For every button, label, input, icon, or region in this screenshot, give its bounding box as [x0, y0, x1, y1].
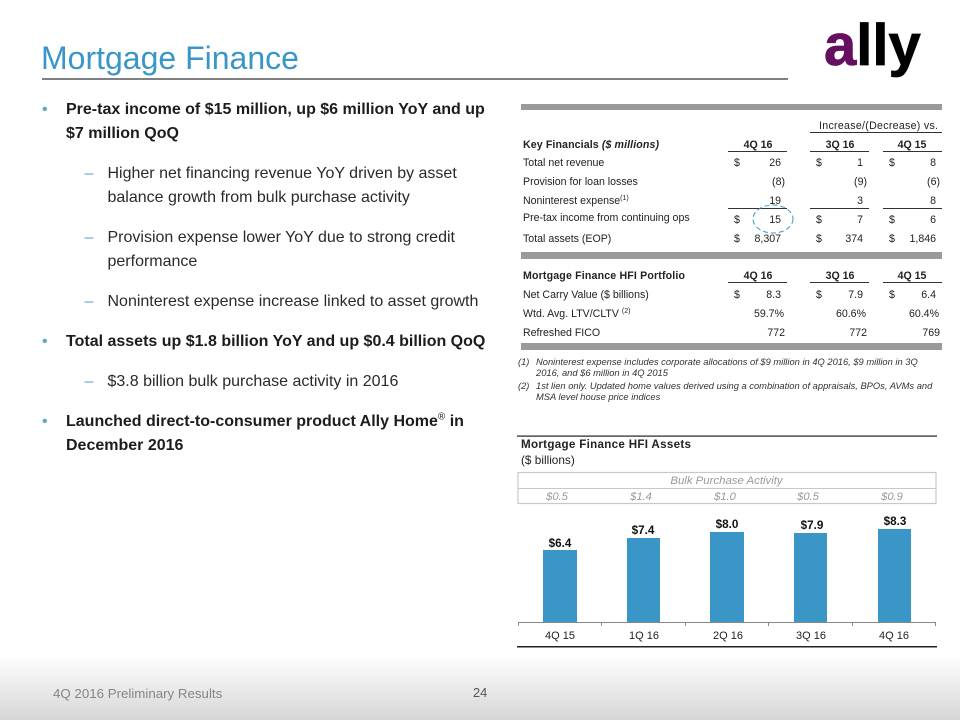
bulk purchase activity table: $1.0 [713, 491, 737, 503]
table rules [728, 132, 942, 282]
table: key financials: Pre-tax income from continuing ops [523, 212, 690, 224]
callout: dashed circle around 15 [753, 205, 793, 233]
table: key financials: $ [816, 214, 822, 226]
chart title [521, 438, 691, 467]
table: key financials: 374 [845, 233, 863, 245]
footnotes: (2) [518, 381, 529, 391]
table: key financials: Total assets (EOP) [523, 233, 611, 245]
footnotes: Noninterest expense includes corporate allocations of $9 million in 4Q 2016, $9 million in 3Q [536, 357, 918, 367]
table: key financials: $ [734, 214, 740, 226]
table: key financials: 6 [930, 214, 936, 226]
bullet 3: Launched direct-to-consumer product Ally Home® in [66, 412, 464, 430]
title: Mortgage Finance [41, 40, 299, 76]
sub-bullet: net financing revenue [84, 165, 457, 206]
table: key financials: Increase/(Decrease) vs. [819, 120, 938, 132]
bulk purchase activity table: Bulk Purchase Activity [670, 475, 784, 487]
table: key financials: 26 [769, 157, 781, 169]
table: key financials: 8 [930, 157, 936, 169]
table: HFI portfolio: $ [816, 289, 822, 301]
chart top rule [517, 436, 937, 437]
table: key financials: $ [816, 233, 822, 245]
table: key financials [523, 120, 940, 245]
table: key financials: 1 [857, 157, 863, 169]
table: key financials: Provision for loan losses [523, 176, 638, 188]
table: key financials: Noninterest expense [523, 195, 620, 207]
bullet 1 [42, 101, 485, 142]
table: HFI portfolio [523, 270, 940, 339]
footnotes: 1st lien only. Updated home values derived using a combination of appraisals, BPOs, AVMs and [536, 381, 933, 391]
bar value labels: $8.3 [884, 515, 907, 528]
bar value labels: $6.4 [549, 537, 572, 550]
table: HFI portfolio: 4Q 15 [898, 270, 927, 282]
table: HFI portfolio: Mortgage Finance HFI Portfolio [523, 270, 686, 282]
table: key financials: 3 [857, 195, 863, 207]
sub-bullet: net financing revenue: – [84, 165, 93, 182]
table: key financials: 7 [857, 214, 863, 226]
table: HFI portfolio: 6.4 [921, 289, 936, 301]
table: key financials: $ [889, 233, 895, 245]
table: HFI portfolio: Refreshed FICO [523, 327, 600, 339]
table: HFI portfolio: 7.9 [848, 289, 863, 301]
sub-bullet: net financing revenue: balance growth from bulk purchase activity [108, 189, 410, 206]
bulk purchase activity table: $0.5 [545, 491, 569, 503]
bulk purchase activity table: $0.5 [796, 491, 820, 503]
table: key financials: (6) [927, 176, 940, 188]
bulk purchase activity table [518, 472, 936, 504]
bulk purchase activity table: $0.9 [880, 491, 903, 503]
title rule [42, 78, 788, 80]
bar value labels: $7.4 [632, 524, 655, 537]
table: HFI portfolio: $ [889, 289, 895, 301]
table: HFI portfolio: $ [734, 289, 740, 301]
table: key financials: 4Q 15 [898, 139, 927, 151]
table: HFI portfolio: 60.6% [836, 308, 867, 320]
bullet 1: Pre-tax income of $15 million, up $6 million YoY and up [66, 101, 485, 118]
table: HFI portfolio: 772 [767, 327, 785, 339]
chart title: Mortgage Finance HFI Assets [521, 438, 691, 451]
sub-bullet: bulk purchase: – [84, 373, 93, 390]
table: HFI portfolio: Wtd. Avg. LTV/CLTV [523, 308, 619, 320]
sub-bullet: provision expense: performance [108, 253, 197, 270]
bullet 2: Total assets up $1.8 billion YoY and up $0.4 billion QoQ [66, 333, 485, 350]
table: key financials: 19 [769, 195, 781, 207]
chart bottom rule [517, 646, 937, 648]
sub-bullet: provision expense: – [84, 229, 93, 246]
bullet list [42, 101, 485, 454]
table: key financials: 1,846 [909, 233, 936, 245]
table: HFI portfolio: (2) [622, 308, 630, 315]
bullet 3: • [42, 413, 48, 430]
table: key financials: 8 [930, 195, 936, 207]
table: HFI portfolio: 4Q 16 [744, 270, 773, 282]
footer label: 4Q 2016 Preliminary Results [53, 686, 222, 701]
bullet 1: $7 million QoQ [66, 125, 179, 142]
bars [543, 529, 911, 622]
table: key financials: 3Q 16 [826, 139, 855, 151]
footnotes [518, 357, 933, 402]
footer gradient background [0, 655, 960, 720]
axis labels: 4Q 15 [545, 630, 575, 642]
chart: Mortgage Finance HFI Assets [517, 436, 937, 648]
table: HFI portfolio: 60.4% [909, 308, 940, 320]
table: HFI portfolio: 769 [922, 327, 940, 339]
table: key financials: $ [889, 157, 895, 169]
table: key financials: $ [734, 233, 740, 245]
page number: 24 [473, 685, 487, 700]
axis labels [545, 630, 909, 642]
table: key financials: (9) [854, 176, 867, 188]
chart title: ($ billions) [521, 453, 575, 467]
table: key financials: (1) [620, 195, 629, 202]
bullet 1: • [42, 101, 48, 118]
footnotes: MSA level house price indices [536, 392, 661, 402]
bar value labels [549, 515, 907, 550]
table: HFI portfolio: 772 [849, 327, 867, 339]
table: HFI portfolio: 59.7% [754, 308, 785, 320]
sub-bullet: net financing revenue: Higher net financing revenue YoY driven by asset [108, 165, 457, 182]
footnotes: 2016, and $6 million in 4Q 2015 [535, 368, 669, 378]
axis labels: 3Q 16 [796, 630, 826, 642]
table: key financials: $ [816, 157, 822, 169]
bar value labels: $8.0 [716, 518, 739, 531]
financial tables [518, 104, 942, 402]
table: key financials: 4Q 16 [744, 139, 773, 151]
table: key financials: Key Financials ($ millions) [523, 139, 659, 151]
sub-bullet: provision expense [84, 229, 455, 270]
table bands [521, 104, 942, 350]
bullet 3: December 2016 [66, 437, 183, 454]
table: key financials: (8) [772, 176, 785, 188]
axis labels: 4Q 16 [879, 630, 909, 642]
table: key financials: Total net revenue [523, 157, 604, 169]
footnotes: (1) [518, 357, 529, 367]
bullet 3 [42, 412, 464, 454]
table: HFI portfolio: 8.3 [766, 289, 781, 301]
axis labels: 2Q 16 [713, 630, 743, 642]
axis [518, 622, 936, 626]
table: HFI portfolio: Net Carry Value ($ billions) [523, 289, 649, 301]
sub-bullet: provision expense: Provision expense lower YoY due to strong credit [108, 229, 455, 246]
sub-bullet: noninterest expense: Noninterest expense increase linked to asset growth [108, 293, 478, 310]
sub-bullet: noninterest expense: – [84, 293, 93, 310]
table: key financials: 15 [769, 214, 781, 226]
table: key financials: $ [734, 157, 740, 169]
sub-bullet: bulk purchase: $3.8 billion bulk purchase activity in 2016 [108, 373, 398, 390]
axis labels: 1Q 16 [629, 630, 659, 642]
table: HFI portfolio: 3Q 16 [826, 270, 855, 282]
bulk purchase activity table: $1.4 [629, 491, 652, 503]
bar value labels: $7.9 [801, 519, 824, 532]
bullet 2: • [42, 333, 48, 350]
table: key financials: $ [889, 214, 895, 226]
table: key financials: 8,307 [754, 233, 781, 245]
